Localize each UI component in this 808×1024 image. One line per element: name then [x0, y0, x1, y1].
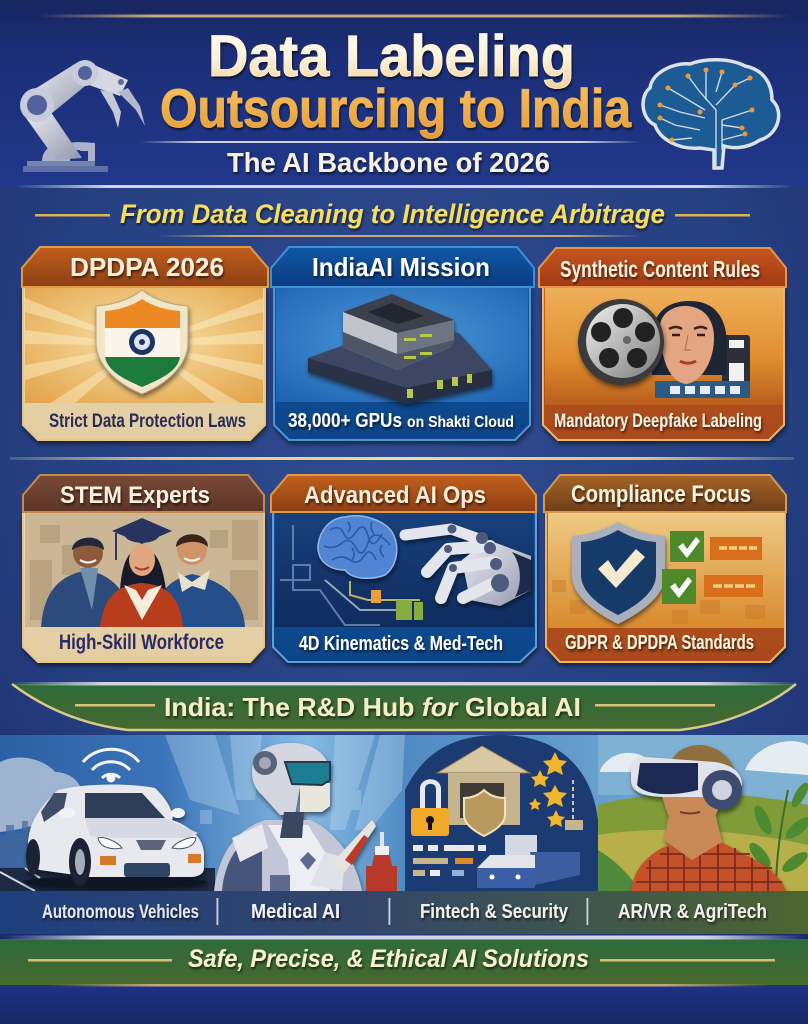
panel: Synthetic Content Rules — [539, 248, 786, 440]
illustration band: applications — [0, 735, 808, 891]
panel: Compliance Focus — [544, 475, 786, 662]
caption: on Shakti Cloud — [407, 414, 514, 431]
footer banner — [0, 936, 808, 986]
subtitle: The AI Backbone of 2026 — [227, 147, 550, 178]
icon: circuit brain — [643, 60, 779, 168]
icon: medical robot — [214, 743, 376, 891]
caption: High-Skill Workforce — [59, 631, 224, 654]
icon: sample bottle — [366, 832, 397, 891]
main title block — [15, 14, 793, 188]
header: STEM Experts — [60, 482, 210, 509]
icon: shield with checkmark — [572, 522, 665, 624]
section heading: From Data Cleaning to Intelligence Arbitrage — [120, 199, 665, 229]
icon: robot arm — [20, 60, 145, 172]
panel: IndiaAI Mission — [271, 247, 534, 440]
label: Autonomous Vehicles: Autonomous Vehicles — [42, 902, 199, 923]
icon: film reel — [578, 299, 664, 385]
icon: woman's face — [652, 301, 727, 384]
icon: robot hand — [405, 524, 531, 606]
icon: plant — [749, 782, 808, 877]
header: IndiaAI Mission — [312, 252, 490, 282]
title line 2: Outsourcing to India — [160, 77, 631, 139]
labels band — [0, 891, 808, 934]
icon: padlock — [411, 779, 449, 836]
icon: bank — [437, 746, 530, 825]
header — [23, 475, 264, 512]
icon: wifi signal — [83, 749, 139, 781]
caption: Strict Data Protection Laws — [49, 411, 246, 432]
icon: India flag shield — [96, 290, 188, 394]
label: Fintech & Security: Fintech & Security — [420, 901, 569, 923]
icon: green check boxes — [662, 531, 704, 604]
header: Compliance Focus — [571, 481, 751, 508]
divider — [10, 457, 794, 460]
icon: gold stars — [529, 752, 567, 827]
scene: clouds and road — [0, 757, 215, 891]
icon: farmer with VR headset — [631, 745, 786, 891]
title line 1: Data Labeling — [208, 24, 575, 89]
illustration: three professionals — [41, 518, 245, 627]
footer banner: Safe, Precise, & Ethical AI Solutions — [188, 945, 589, 973]
panel: DPDPA 2026 — [22, 247, 268, 440]
illustration: circuit traces — [280, 525, 423, 625]
banner: R&D hub — [10, 682, 798, 730]
header — [22, 247, 268, 287]
caption: 4D Kinematics & Med-Tech — [299, 633, 503, 655]
header: DPDPA 2026 — [70, 252, 224, 282]
header — [539, 248, 786, 287]
header — [271, 247, 534, 287]
panel: Advanced AI Ops — [271, 475, 536, 662]
scene: farmland — [598, 735, 808, 891]
caption: 38,000+ GPUs — [288, 410, 402, 432]
icon: GPU server stack — [308, 294, 492, 404]
icon: blue brain — [318, 516, 397, 578]
caption — [288, 410, 514, 432]
icon: autonomous car — [23, 784, 207, 888]
icon: clapper panel — [655, 335, 750, 398]
icon: security shield — [464, 790, 505, 836]
icon: data bars — [413, 780, 583, 876]
label: Medical AI: Medical AI — [251, 901, 340, 923]
banner: R&D hub: India: The R&D Hub for Global AI — [164, 692, 581, 722]
icon: blue truck — [477, 835, 580, 888]
scene: data light rays — [165, 735, 405, 830]
header — [271, 475, 536, 512]
panel: STEM Experts — [23, 475, 264, 662]
label: AR/VR & AgriTech: AR/VR & AgriTech — [618, 901, 767, 923]
scene: fintech dome — [405, 735, 598, 891]
header: Advanced AI Ops — [304, 482, 486, 509]
icon: orange status boxes — [704, 537, 763, 597]
header — [544, 475, 786, 512]
